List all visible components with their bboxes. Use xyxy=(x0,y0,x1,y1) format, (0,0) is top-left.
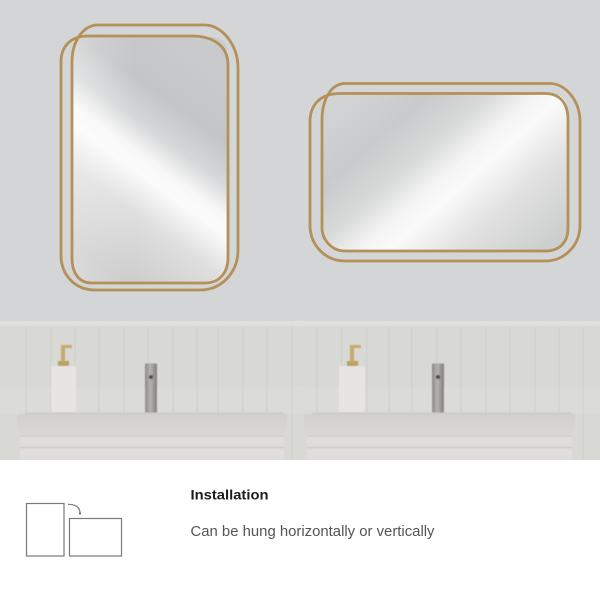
bathroom scene: left vanity xyxy=(0,321,305,460)
bathroom wall base xyxy=(0,322,600,460)
portrait rectangle xyxy=(26,504,64,556)
tile wall xyxy=(0,321,305,326)
heading: Installation: Installation xyxy=(190,488,268,502)
soap dispenser xyxy=(339,345,365,412)
mirror glass xyxy=(73,37,227,282)
faucet xyxy=(145,364,157,412)
vanity counter xyxy=(17,414,287,435)
wall background xyxy=(0,0,600,322)
mirror glass xyxy=(323,94,567,250)
soap dispenser xyxy=(51,345,76,412)
rotation arrow xyxy=(68,504,81,514)
landscape rectangle xyxy=(70,518,122,556)
bathroom scene: right vanity xyxy=(295,321,600,460)
vertical mirror xyxy=(61,25,238,290)
icon: rotate portrait to landscape xyxy=(26,504,122,556)
horizontal mirror xyxy=(310,84,580,261)
vanity counter xyxy=(304,414,575,435)
vanity cabinet xyxy=(307,435,572,460)
double gold frame xyxy=(310,84,580,261)
faucet xyxy=(432,364,444,412)
double gold frame xyxy=(61,25,238,290)
tile wall xyxy=(295,321,600,326)
bottom white panel xyxy=(0,460,600,600)
vanity cabinet xyxy=(20,435,284,460)
description text: Can be hung horizontally or vertically xyxy=(190,524,435,540)
